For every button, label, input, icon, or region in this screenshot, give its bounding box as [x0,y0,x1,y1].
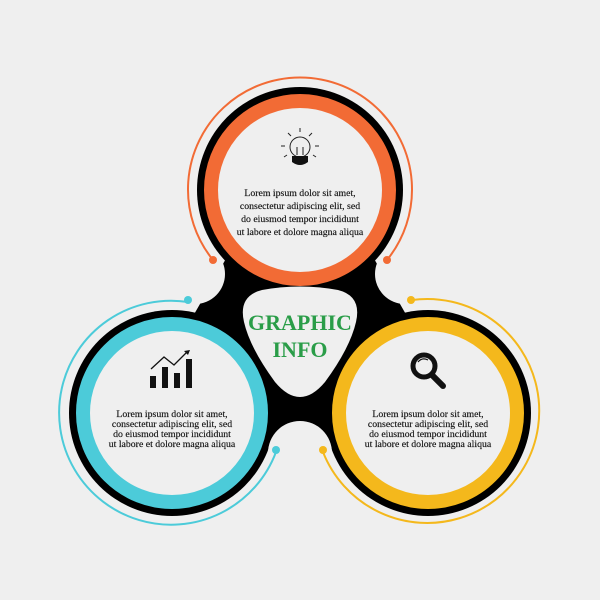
icon: magnifier [413,355,443,386]
panel: left cyan circle: Lorem ipsum dolor sit amet, [116,409,228,420]
panel: top orange circle: Lorem ipsum dolor sit amet, [244,188,356,199]
black connector hub [69,87,531,516]
panel: left cyan circle: ut labore et dolore magna aliqua [109,439,236,450]
center label shape: GRAPHIC [248,310,352,335]
panel: left cyan circle: do eiusmod tempor incididunt [113,429,231,440]
panel: right yellow circle: Lorem ipsum dolor sit amet, [372,409,484,420]
center label shape: INFO [272,337,328,362]
center label shape [243,286,357,397]
panel: top orange circle [188,77,412,279]
panel: right yellow circle: consectetur adipiscing elit, sed [368,419,488,430]
panel: right yellow circle: ut labore et dolore magna aliqua [365,439,492,450]
panel: top orange circle: do eiusmod tempor incididunt [241,214,359,225]
panel: right yellow circle [319,296,539,523]
icon: light bulb [281,128,319,165]
panel: top orange circle: ut labore et dolore magna aliqua [237,227,364,238]
panel: left cyan circle: consectetur adipiscing elit, sed [112,419,232,430]
icon: bar chart [150,350,192,388]
panel: right yellow circle: do eiusmod tempor incididunt [369,429,487,440]
panel: left cyan circle [59,296,280,525]
panel: top orange circle: consectetur adipiscing elit, sed [240,201,360,212]
